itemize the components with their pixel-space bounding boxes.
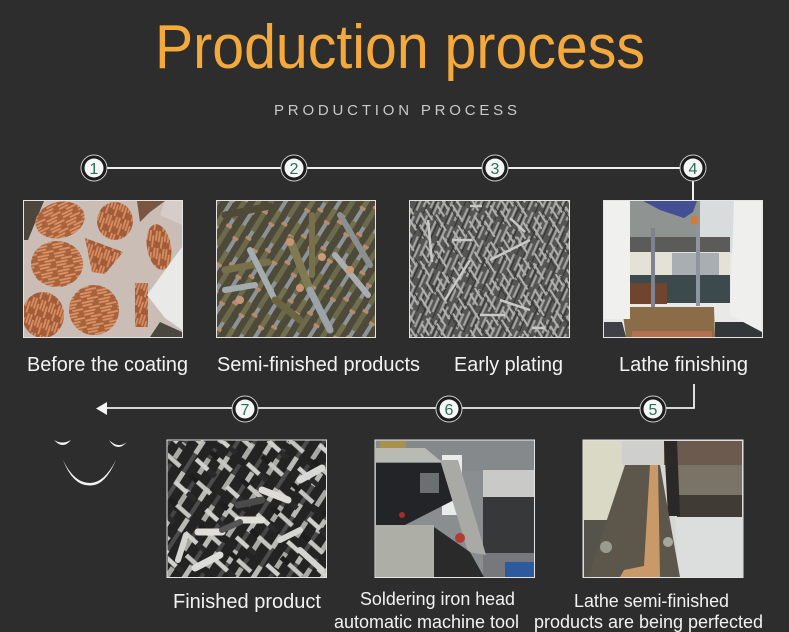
- step marker 1: 1: [90, 161, 99, 178]
- step marker 5: [640, 396, 666, 422]
- step marker 4: [680, 155, 706, 181]
- photo 3: early plating rods: [410, 200, 570, 338]
- connector and return arrow: [96, 384, 694, 415]
- photo 2: semi-finished rods: [216, 200, 376, 338]
- photo 6: automatic machine tool: [375, 440, 534, 578]
- label: lathe semi-finished products are being perfected: Lathe semi-finished: [574, 591, 729, 611]
- label: lathe semi-finished products are being perfected: [534, 591, 763, 632]
- step marker 6: 6: [445, 402, 454, 419]
- photo 5: lathe semi-finished products: [583, 440, 743, 578]
- photo 4: lathe finishing machine: [604, 200, 762, 338]
- step marker 2: 2: [290, 161, 299, 178]
- step marker 1: [81, 155, 107, 181]
- label: early plating: Early plating: [454, 354, 563, 376]
- label: lathe semi-finished products are being perfected: products are being perfected: [534, 612, 763, 632]
- step marker 4: 4: [689, 161, 698, 178]
- label: semi-finished products: Semi-finished products: [217, 354, 420, 376]
- step marker 2: [281, 155, 307, 181]
- label: soldering iron head automatic machine tool: [334, 589, 519, 632]
- step marker 3: [482, 155, 508, 181]
- step marker 7: [232, 396, 258, 422]
- title: Production process: [155, 13, 645, 82]
- label: lathe finishing: Lathe finishing: [619, 354, 748, 376]
- label: before the coating: Before the coating: [27, 354, 188, 376]
- step marker 5: 5: [649, 402, 658, 419]
- step marker 3: 3: [491, 161, 500, 178]
- photo 1: copper rods in bags: [22, 196, 182, 338]
- step marker 6: [436, 396, 462, 422]
- label: soldering iron head automatic machine tool: Soldering iron head: [360, 589, 515, 609]
- subtitle: PRODUCTION PROCESS: [274, 102, 517, 119]
- step marker 7: 7: [241, 402, 250, 419]
- top process line: [94, 168, 693, 200]
- icon: smiling face: [54, 440, 127, 486]
- label: soldering iron head automatic machine tool: automatic machine tool: [334, 612, 519, 632]
- label: finished product: Finished product: [173, 591, 321, 613]
- photo 7: finished product rods: [167, 440, 326, 578]
